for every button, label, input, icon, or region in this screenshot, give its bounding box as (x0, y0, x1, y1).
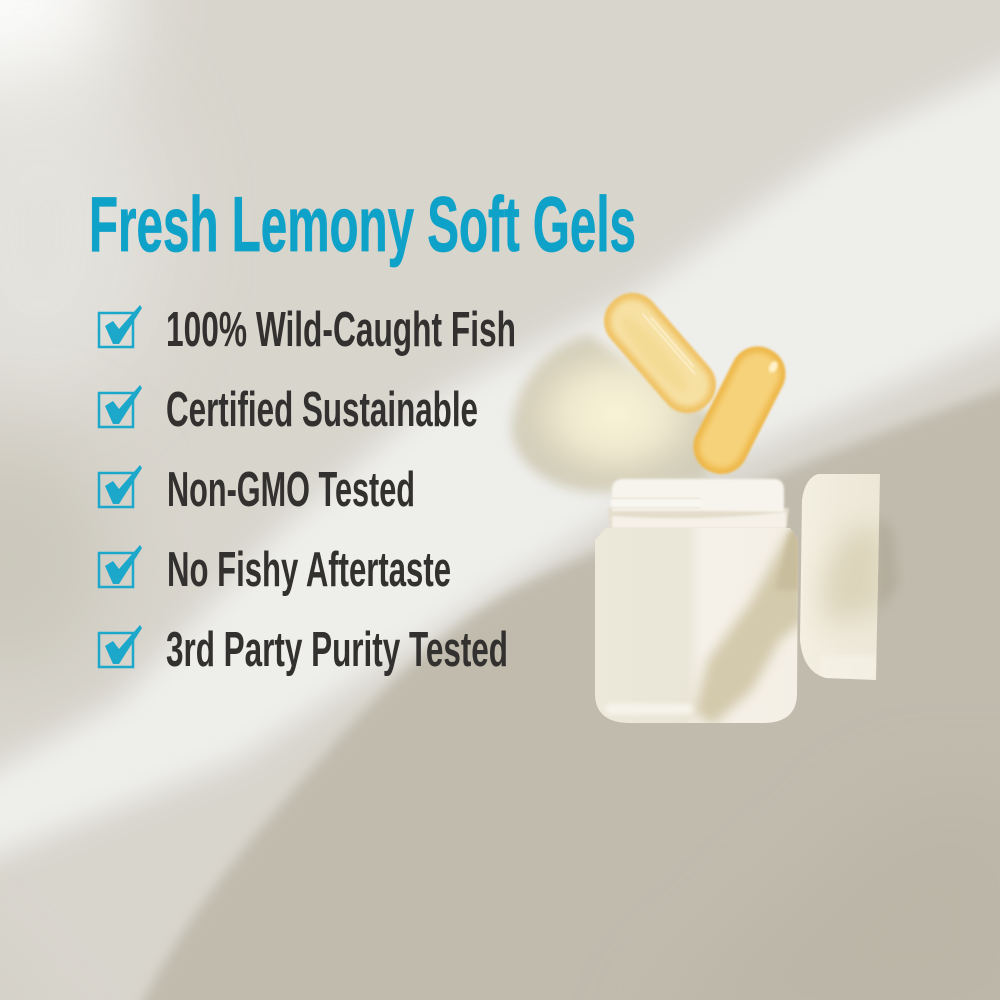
jar lid (800, 474, 880, 680)
icon: checkbox (99, 465, 142, 507)
icon: checkbox (99, 385, 142, 427)
jar (590, 470, 898, 729)
soft gel shadow glow (512, 335, 720, 492)
item: No Fishy Aftertaste (99, 543, 451, 597)
soft gel capsule: upper (593, 282, 727, 424)
soft gel capsule: lower (684, 337, 795, 483)
icon: checkbox (99, 625, 142, 667)
feature list (99, 303, 516, 677)
jar lid shadow on wall (876, 515, 898, 615)
title: Fresh Lemony Soft Gels (89, 180, 636, 268)
item: 100% Wild-Caught Fish (99, 303, 516, 357)
item: No Fishy Aftertaste: No Fishy Aftertaste (167, 543, 451, 597)
jar neck and threads (608, 479, 789, 530)
item: 100% Wild-Caught Fish: 100% Wild-Caught Fish (166, 303, 516, 357)
item: Non-GMO Tested: Non-GMO Tested (167, 463, 415, 517)
item: Certified Sustainable (99, 383, 478, 437)
jar body (595, 528, 798, 723)
item: 3rd Party Purity Tested (99, 623, 508, 677)
item: 3rd Party Purity Tested: 3rd Party Purity Tested (166, 623, 508, 677)
item: Certified Sustainable: Certified Sustainable (166, 383, 478, 437)
icon: checkbox (99, 305, 142, 347)
item: Non-GMO Tested (99, 463, 415, 517)
icon: checkbox (99, 545, 142, 587)
